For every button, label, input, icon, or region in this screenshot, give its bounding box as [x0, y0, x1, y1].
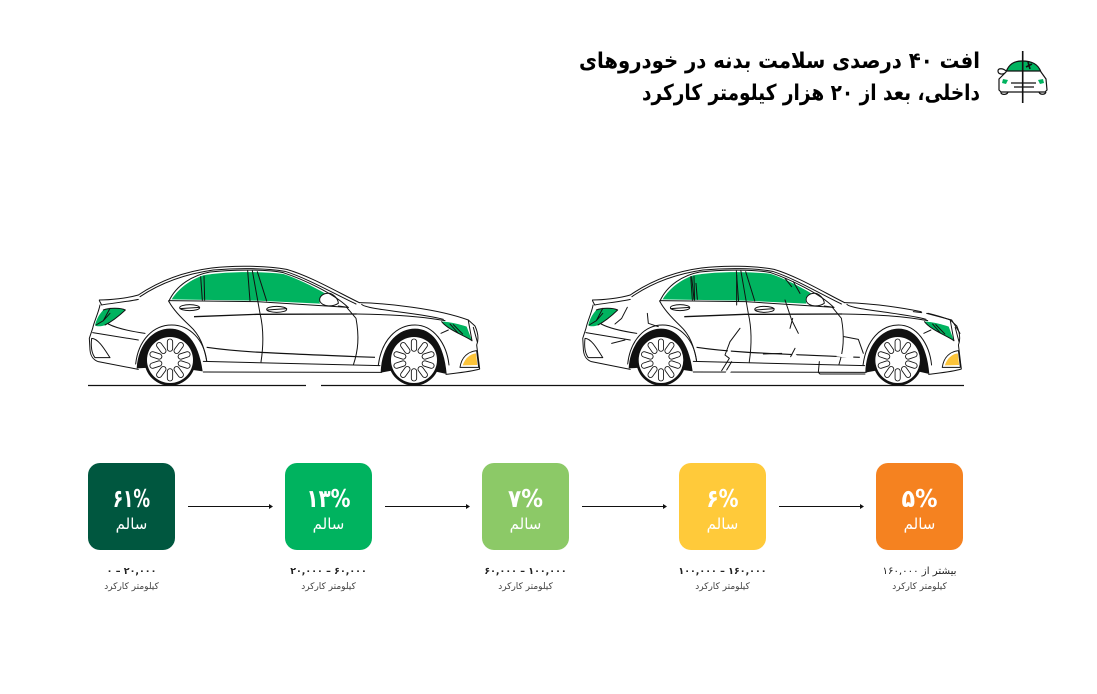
step card: 60,000 to 100,000 km: سالم	[510, 515, 541, 533]
arrow	[188, 504, 273, 509]
title: داخلی، بعد از ۲۰ هزار کیلومتر کارکرد	[642, 81, 980, 106]
step card: 100,000 to 160,000 km: سالم	[707, 515, 738, 533]
step card: 100,000 to 160,000 km	[678, 463, 767, 592]
car: damaged sedan	[583, 266, 961, 386]
icon: car front with crosshair	[998, 51, 1047, 103]
step card: over 160,000 km: سالم	[904, 515, 935, 533]
road line	[88, 384, 964, 386]
step card: over 160,000 km: ۵%	[902, 484, 938, 513]
step card: 20,000 to 60,000 km	[285, 463, 372, 592]
step card: 60,000 to 100,000 km: ۶۰,۰۰۰ – ۱۰۰,۰۰۰	[484, 566, 567, 577]
title: افت ۴۰ درصدی سلامت بدنه در خودروهای	[579, 49, 980, 74]
step card: 20,000 to 60,000 km: کیلومتر کارکرد	[301, 582, 357, 592]
step card: 60,000 to 100,000 km	[482, 463, 569, 592]
title	[579, 49, 980, 106]
arrow	[582, 504, 667, 509]
step card: 100,000 to 160,000 km: ۶%	[706, 484, 738, 513]
step card: 100,000 to 160,000 km: کیلومتر کارکرد	[695, 582, 751, 592]
step card: over 160,000 km	[876, 463, 963, 592]
arrow	[385, 504, 470, 509]
step card: 0 to 20,000 km	[88, 463, 175, 592]
step card: 60,000 to 100,000 km: ۷%	[508, 484, 543, 513]
step card: 0 to 20,000 km: سالم	[116, 515, 147, 533]
step card: 60,000 to 100,000 km: کیلومتر کارکرد	[498, 582, 554, 592]
step card: 20,000 to 60,000 km: ۲۰,۰۰۰ – ۶۰,۰۰۰	[290, 566, 367, 577]
step card: 0 to 20,000 km: ۰ – ۲۰,۰۰۰	[107, 566, 156, 577]
step card: 20,000 to 60,000 km: ۱۳%	[306, 484, 350, 513]
step card: over 160,000 km: کیلومتر کارکرد	[892, 582, 948, 592]
car: healthy sedan	[89, 266, 480, 386]
step card: 100,000 to 160,000 km: ۱۰۰,۰۰۰ – ۱۶۰,۰۰۰	[678, 566, 767, 577]
arrow	[779, 504, 864, 509]
step card: 0 to 20,000 km: ۶۱%	[113, 484, 150, 513]
step card: 0 to 20,000 km: کیلومتر کارکرد	[104, 582, 160, 592]
step card: 20,000 to 60,000 km: سالم	[313, 515, 344, 533]
step card: over 160,000 km: بیشتر از ۱۶۰,۰۰۰	[882, 566, 956, 577]
